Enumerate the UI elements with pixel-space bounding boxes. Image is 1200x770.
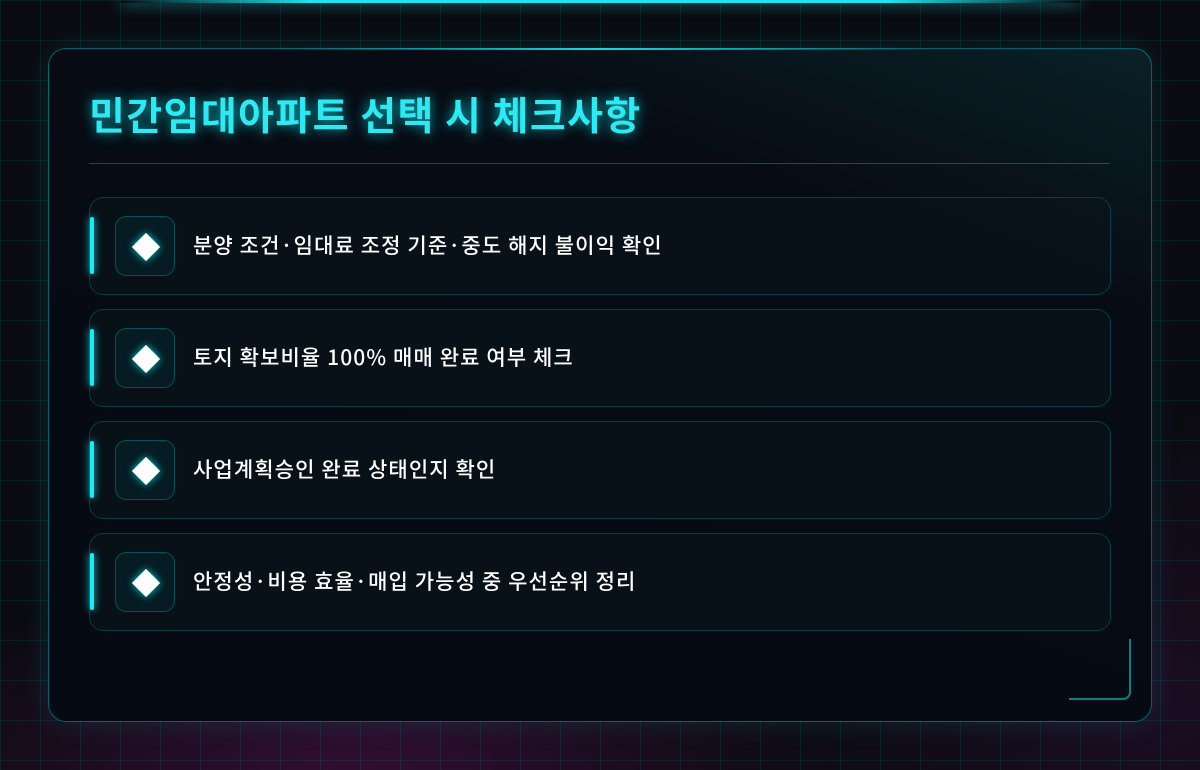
icon: diamond (115, 328, 175, 388)
icon: diamond (115, 440, 175, 500)
item 1 (89, 197, 1111, 295)
corner bracket (1069, 639, 1131, 700)
text 2: 토지 확보비율 100% 매매 완료 여부 체크 (193, 342, 574, 372)
item 4 (89, 533, 1111, 631)
icon: diamond (115, 552, 175, 612)
text 4: 안정성·비용 효율·매입 가능성 중 우선순위 정리 (193, 566, 636, 596)
item 3 (89, 421, 1111, 519)
item 2 (89, 309, 1111, 407)
text 1: 분양 조건·임대료 조정 기준·중도 해지 불이익 확인 (193, 230, 663, 260)
icon: diamond (115, 216, 175, 276)
text 3: 사업계획승인 완료 상태인지 확인 (193, 454, 496, 484)
title: 민간임대아파트 선택 시 체크사항 (89, 86, 642, 142)
